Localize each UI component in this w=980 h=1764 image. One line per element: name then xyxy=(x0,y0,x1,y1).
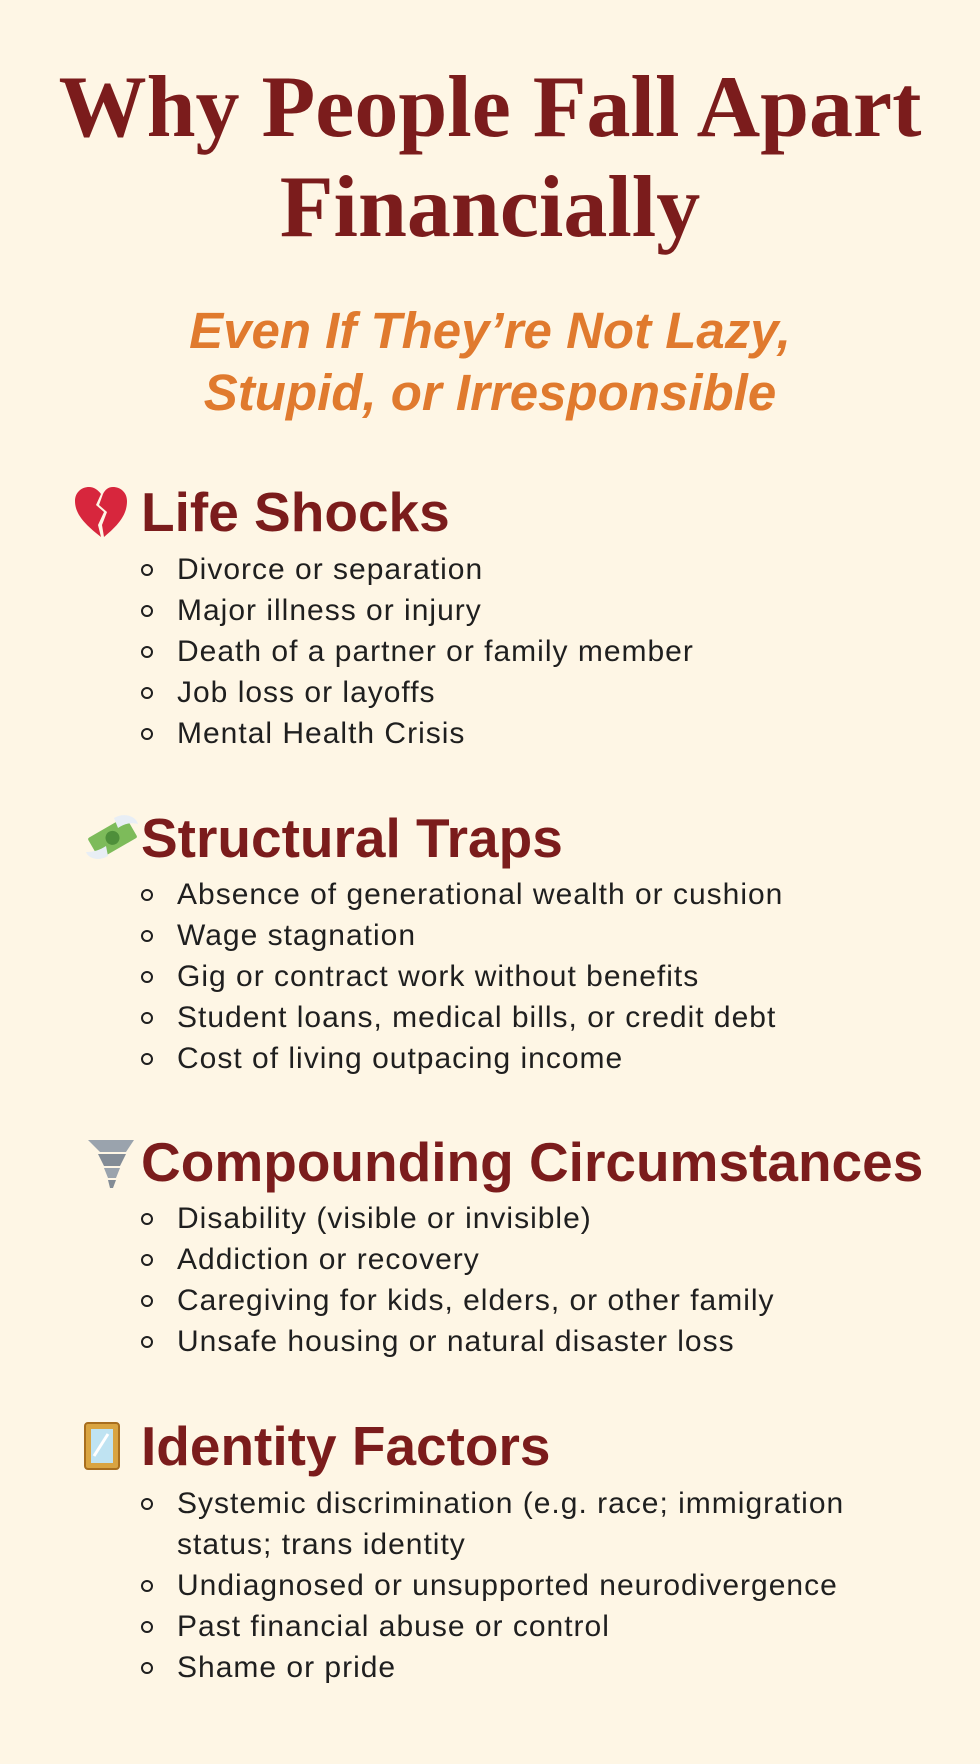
list: life shocks: Major illness or injury xyxy=(177,594,482,627)
list: life shocks: Divorce or separation xyxy=(177,553,483,586)
heading: Life Shocks: Life Shocks xyxy=(141,481,450,543)
list: life shocks: Death of a partner or family member xyxy=(177,635,694,668)
list: identity factors: Undiagnosed or unsupported neurodivergence xyxy=(177,1569,838,1602)
icon: mirror xyxy=(84,1422,120,1470)
title: Why People Fall Apart xyxy=(59,59,921,156)
list: identity factors: Shame or pride xyxy=(177,1651,396,1684)
subtitle: Stupid, or Irresponsible xyxy=(204,364,776,421)
list: structural traps: Wage stagnation xyxy=(177,919,416,952)
heading: Structural Traps: Structural Traps xyxy=(141,807,563,869)
list: life shocks xyxy=(141,553,694,750)
title xyxy=(59,59,922,256)
list: structural traps: Student loans, medical bills, or credit debt xyxy=(177,1001,776,1034)
list: identity factors: status; trans identity xyxy=(177,1528,466,1561)
list: compounding circumstances: Unsafe housing or natural disaster loss xyxy=(177,1325,735,1358)
list: compounding circumstances: Disability (visible or invisible) xyxy=(177,1202,592,1235)
list: compounding circumstances xyxy=(141,1202,775,1358)
subtitle xyxy=(189,302,791,421)
list: compounding circumstances: Addiction or recovery xyxy=(177,1243,480,1276)
list: identity factors xyxy=(141,1487,844,1684)
list: life shocks: Mental Health Crisis xyxy=(177,717,465,750)
title: Financially xyxy=(280,159,700,256)
icon: money with wings xyxy=(86,815,138,859)
list: structural traps: Cost of living outpacing income xyxy=(177,1042,623,1075)
list: identity factors: Systemic discrimination (e.g. race; immigration xyxy=(177,1487,844,1520)
heading: Compounding Circumstances: Compounding Circumstances xyxy=(141,1131,923,1193)
list: compounding circumstances: Caregiving for kids, elders, or other family xyxy=(177,1284,775,1317)
heading: Identity Factors: Identity Factors xyxy=(141,1415,551,1477)
list: structural traps: Gig or contract work without benefits xyxy=(177,960,699,993)
list: identity factors: Past financial abuse or control xyxy=(177,1610,610,1643)
icon: broken heart xyxy=(75,487,127,537)
list: structural traps xyxy=(141,878,783,1075)
icon: tornado xyxy=(88,1140,134,1188)
subtitle: Even If They’re Not Lazy, xyxy=(189,302,791,359)
list: life shocks: Job loss or layoffs xyxy=(177,676,436,709)
list: structural traps: Absence of generational wealth or cushion xyxy=(177,878,783,911)
